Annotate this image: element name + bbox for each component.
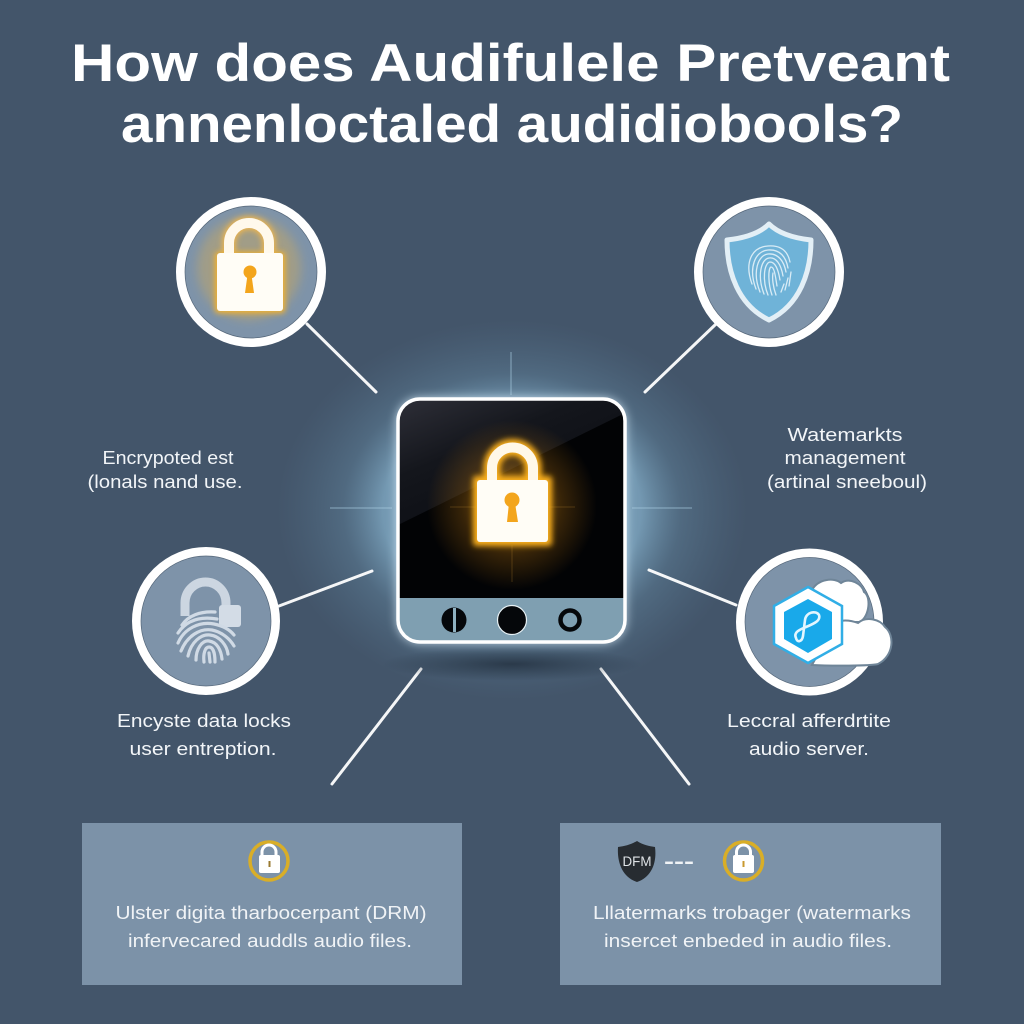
icon: DRM shield: DFM [622,854,652,869]
circle icon: music hexagon and clouds [740,553,891,691]
central device [382,398,642,681]
central glow [277,320,747,700]
panel: DRM [82,823,462,985]
device screen [398,399,625,598]
clouds [812,580,891,666]
panel text: Lllatermarks trobager (watermarks [593,902,911,923]
label: watermarks: management [784,447,906,468]
title [71,34,950,154]
label: watermarks: (artinal sneeboul) [767,471,927,492]
icon: small lock [724,842,762,880]
lock fingerprint [178,612,234,662]
label: encrypted: (lonals nand use. [88,471,242,492]
device buttons [442,606,580,634]
label: encrypted [88,447,242,492]
panel: watermarks [560,823,941,985]
circle icon: fingerprint shield [698,202,840,342]
label: audio server: audio server. [749,738,869,759]
icon: small lock [250,842,288,880]
circle icon: fingerprint lock [136,552,276,690]
device button band [398,598,625,642]
label: encyste [117,710,291,759]
panel text [116,902,426,951]
label: encyste: Encyste data locks [117,710,291,731]
label: audio server [727,710,891,759]
title: How does Audifulele Pretveant [71,34,950,93]
hexagon [774,587,842,663]
circle icon: padlock [180,202,322,342]
dashes: --- [664,851,694,873]
shield fingerprint [749,246,791,295]
label: encrypted: Encrypoted est [102,447,234,468]
panel text: insercet enbeded in audio files. [604,930,892,951]
panel text: infervecared auddls audio files. [128,930,412,951]
connector lines [279,324,736,784]
label: watermarks: Watemarkts [788,424,902,445]
icon: DRM shield [618,841,655,882]
label: audio server: Leccral afferdrtite [727,710,891,731]
label: watermarks [767,424,927,492]
device lock icon [427,420,597,590]
panel text [593,902,911,951]
label: encyste: user entreption. [130,738,276,759]
title: annenloctaled audidiobools? [121,95,903,154]
panel text: Ulster digita tharbocerpant (DRM) [116,902,426,923]
